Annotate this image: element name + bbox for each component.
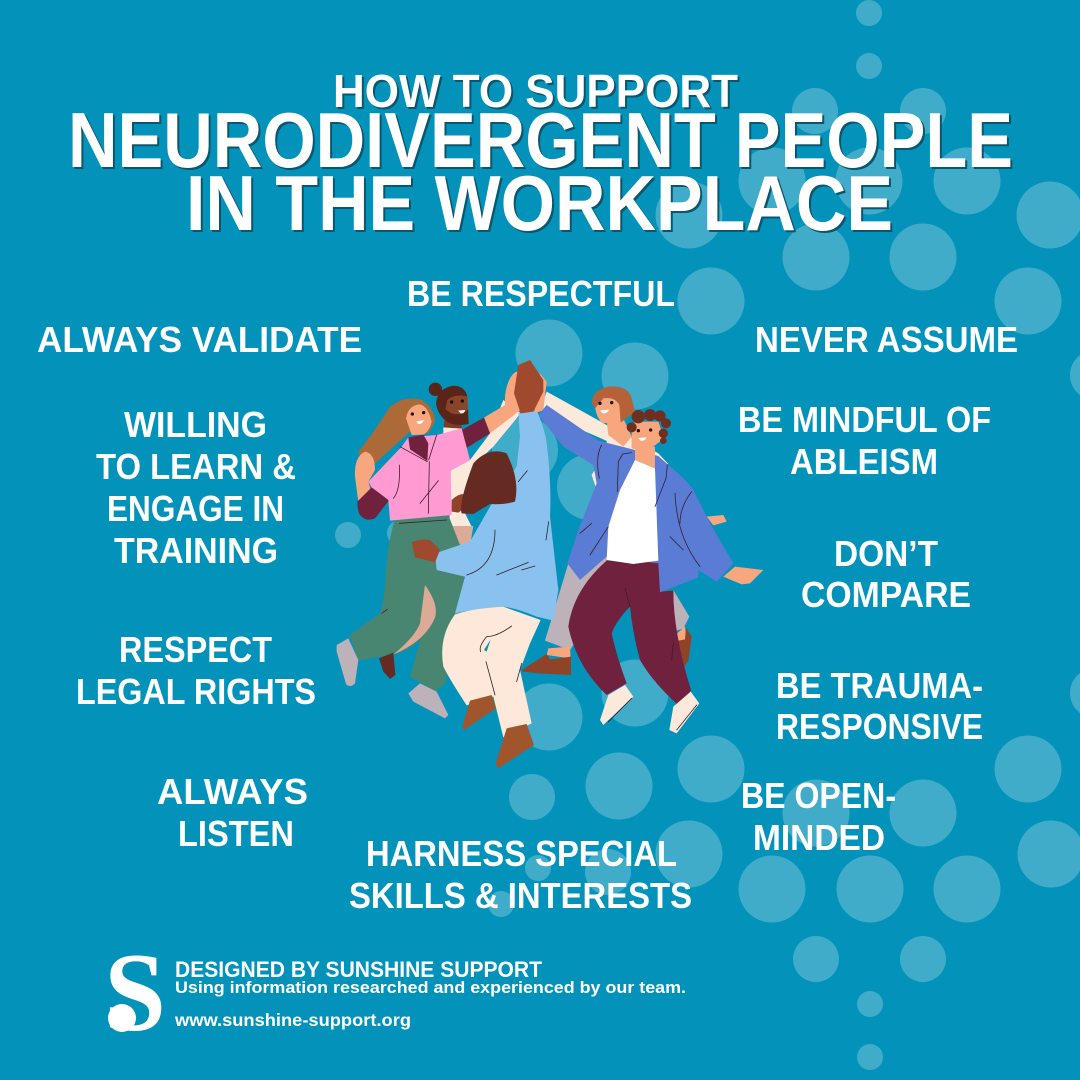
tip: harness special skills and interests: HARNESS SPECIAL bbox=[366, 833, 677, 874]
tip: willing to learn and engage in training: ENGAGE IN bbox=[107, 488, 284, 529]
figure: person in light blue coat seen from behind bbox=[412, 360, 558, 768]
tip: be open-minded bbox=[741, 775, 896, 858]
tip: be respectful: BE RESPECTFUL bbox=[407, 273, 675, 314]
tip: respect legal rights: RESPECT bbox=[119, 629, 272, 670]
tip: always validate: ALWAYS VALIDATE bbox=[37, 319, 362, 360]
title bbox=[68, 65, 1013, 247]
tip: be trauma-responsive: RESPONSIVE bbox=[776, 706, 983, 747]
figure: man in blue blazer and maroon trousers bbox=[538, 405, 763, 733]
footer credit bbox=[175, 957, 686, 997]
footer credit: Using information researched and experienced by our team. bbox=[175, 978, 686, 997]
tip: respect legal rights: LEGAL RIGHTS bbox=[76, 671, 316, 712]
illustration: coworkers high-fiving bbox=[337, 360, 763, 768]
tip: harness special skills and interests bbox=[349, 833, 692, 916]
tip: respect legal rights bbox=[76, 629, 316, 712]
tip: always listen: ALWAYS bbox=[157, 771, 308, 812]
tip: willing to learn and engage in training bbox=[96, 404, 296, 571]
tip: be open-minded: MINDED bbox=[753, 817, 885, 858]
tip: willing to learn and engage in training: TO LEARN & bbox=[96, 446, 296, 487]
tip: be mindful of ableism: ABLEISM bbox=[790, 441, 938, 482]
tip: be trauma-responsive bbox=[776, 665, 983, 747]
footer credit: DESIGNED BY SUNSHINE SUPPORT bbox=[175, 957, 543, 982]
tip: willing to learn and engage in training: TRAINING bbox=[114, 530, 278, 571]
tip: always listen bbox=[157, 771, 308, 854]
tip: harness special skills and interests: SKILLS & INTERESTS bbox=[349, 875, 692, 916]
tip: be mindful of ableism: BE MINDFUL OF bbox=[738, 399, 991, 440]
tip: don't compare: COMPARE bbox=[801, 574, 971, 615]
title: IN THE WORKPLACE bbox=[186, 159, 893, 247]
figure: woman with short auburn hair behind bbox=[522, 386, 692, 675]
tip: never assume: NEVER ASSUME bbox=[755, 319, 1018, 360]
tip: be open-minded: BE OPEN- bbox=[741, 775, 896, 816]
figure: man with bun behind bbox=[429, 383, 521, 547]
tip: don't compare: DON’T bbox=[834, 533, 938, 574]
figure: woman in pink shirt and green trousers bbox=[337, 372, 521, 718]
title: HOW TO SUPPORT bbox=[333, 65, 738, 117]
tip: always listen: LISTEN bbox=[178, 813, 294, 854]
footer logo: S mark: S bbox=[104, 931, 166, 1055]
tip: willing to learn and engage in training: WILLING bbox=[124, 404, 267, 445]
tip: don't compare bbox=[801, 533, 971, 615]
tip: be mindful of ableism bbox=[738, 399, 991, 482]
tip: be trauma-responsive: BE TRAUMA- bbox=[776, 665, 983, 706]
footer website: www.sunshine-support.org bbox=[174, 1010, 411, 1030]
